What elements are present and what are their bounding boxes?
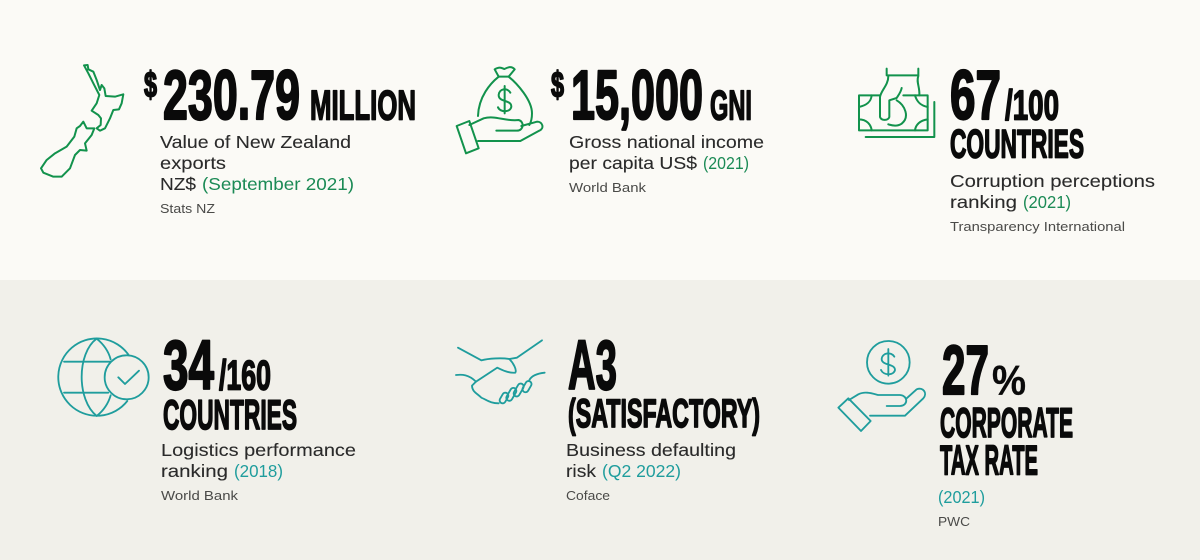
description: export value: Value of New Zealand	[160, 132, 351, 152]
headline: 34/160 countries: 34	[163, 326, 214, 404]
headline: A3 (satisfactory)	[568, 326, 760, 436]
panel: export value	[41, 56, 416, 216]
headline: 67/100 countries: COUNTRIES	[950, 122, 1084, 166]
headline: A3 (satisfactory): (SATISFACTORY)	[568, 392, 760, 436]
headline: 27% corporate tax rate: CORPORATE	[940, 399, 1073, 446]
description: corruption perceptions: (2021)	[1023, 192, 1071, 212]
panel: gross national income	[457, 56, 764, 195]
headline: $15,000 GNI: 15,000	[571, 56, 703, 134]
headline: 34/160 countries	[163, 326, 297, 438]
description: gross national income	[569, 132, 764, 173]
description: corruption perceptions	[950, 171, 1155, 212]
description: export value: (September 2021)	[202, 174, 354, 194]
source: PWC: PWC	[938, 514, 970, 529]
headline: 27% corporate tax rate: %	[992, 356, 1026, 404]
headline: $15,000 GNI: GNI	[710, 82, 752, 128]
headline: $230.79 million: MILLION	[310, 82, 416, 128]
description: logistics performance: (2018)	[234, 461, 283, 481]
headline: 34/160 countries: COUNTRIES	[163, 391, 297, 438]
source: Coface: Coface	[566, 488, 610, 503]
icon: cash in hand	[859, 69, 934, 137]
icon: handshake	[456, 340, 545, 404]
headline: 67/100 countries: /100	[1005, 82, 1059, 128]
description: export value: NZ$	[160, 174, 196, 194]
description: business defaulting risk: (Q2 2022)	[602, 461, 681, 481]
panel: corporate tax rate	[838, 331, 1073, 529]
description: corruption perceptions: ranking	[950, 192, 1017, 212]
description: business defaulting risk: risk	[566, 461, 596, 481]
icon: dollar coin over hand	[838, 341, 925, 431]
description: year: (2021)	[938, 487, 985, 507]
panel: corruption perceptions	[859, 56, 1155, 234]
description: gross national income: (2021)	[703, 153, 749, 173]
headline: 27% corporate tax rate: 27	[942, 331, 989, 409]
description: gross national income: Gross national income	[569, 132, 764, 152]
source: Transparency International: Transparency International	[950, 219, 1125, 234]
headline: 27% corporate tax rate: TAX RATE	[940, 436, 1038, 484]
headline: $15,000 GNI: $	[551, 64, 564, 105]
panel: business defaulting risk	[456, 326, 760, 503]
description: corruption perceptions: Corruption perceptions	[950, 171, 1155, 191]
panel: logistics performance	[58, 326, 356, 503]
description: gross national income: per capita US$	[569, 153, 697, 173]
headline: A3 (satisfactory): A3	[568, 326, 617, 404]
headline: $230.79 million: $	[144, 64, 157, 105]
headline: 34/160 countries: /160	[219, 352, 271, 398]
description: export value	[160, 132, 354, 194]
headline: 67/100 countries: 67	[950, 56, 1001, 134]
source: World Bank: World Bank	[569, 180, 647, 195]
icon: globe with check mark	[58, 338, 149, 416]
headline: $230.79 million: 230.79	[163, 56, 300, 134]
description: business defaulting risk: Business defaulting	[566, 440, 736, 460]
icon: New Zealand map	[41, 65, 123, 177]
headline: 67/100 countries	[950, 56, 1084, 166]
icon: money bag in hand	[457, 67, 542, 153]
description: business defaulting risk	[566, 440, 736, 481]
description: logistics performance: ranking	[161, 461, 228, 481]
description: export value: exports	[160, 153, 226, 173]
headline: 27% corporate tax rate	[940, 331, 1073, 484]
source: World Bank: World Bank	[161, 488, 239, 503]
source: Stats NZ: Stats NZ	[160, 201, 215, 216]
description: logistics performance	[161, 440, 356, 481]
description: logistics performance: Logistics performance	[161, 440, 356, 460]
